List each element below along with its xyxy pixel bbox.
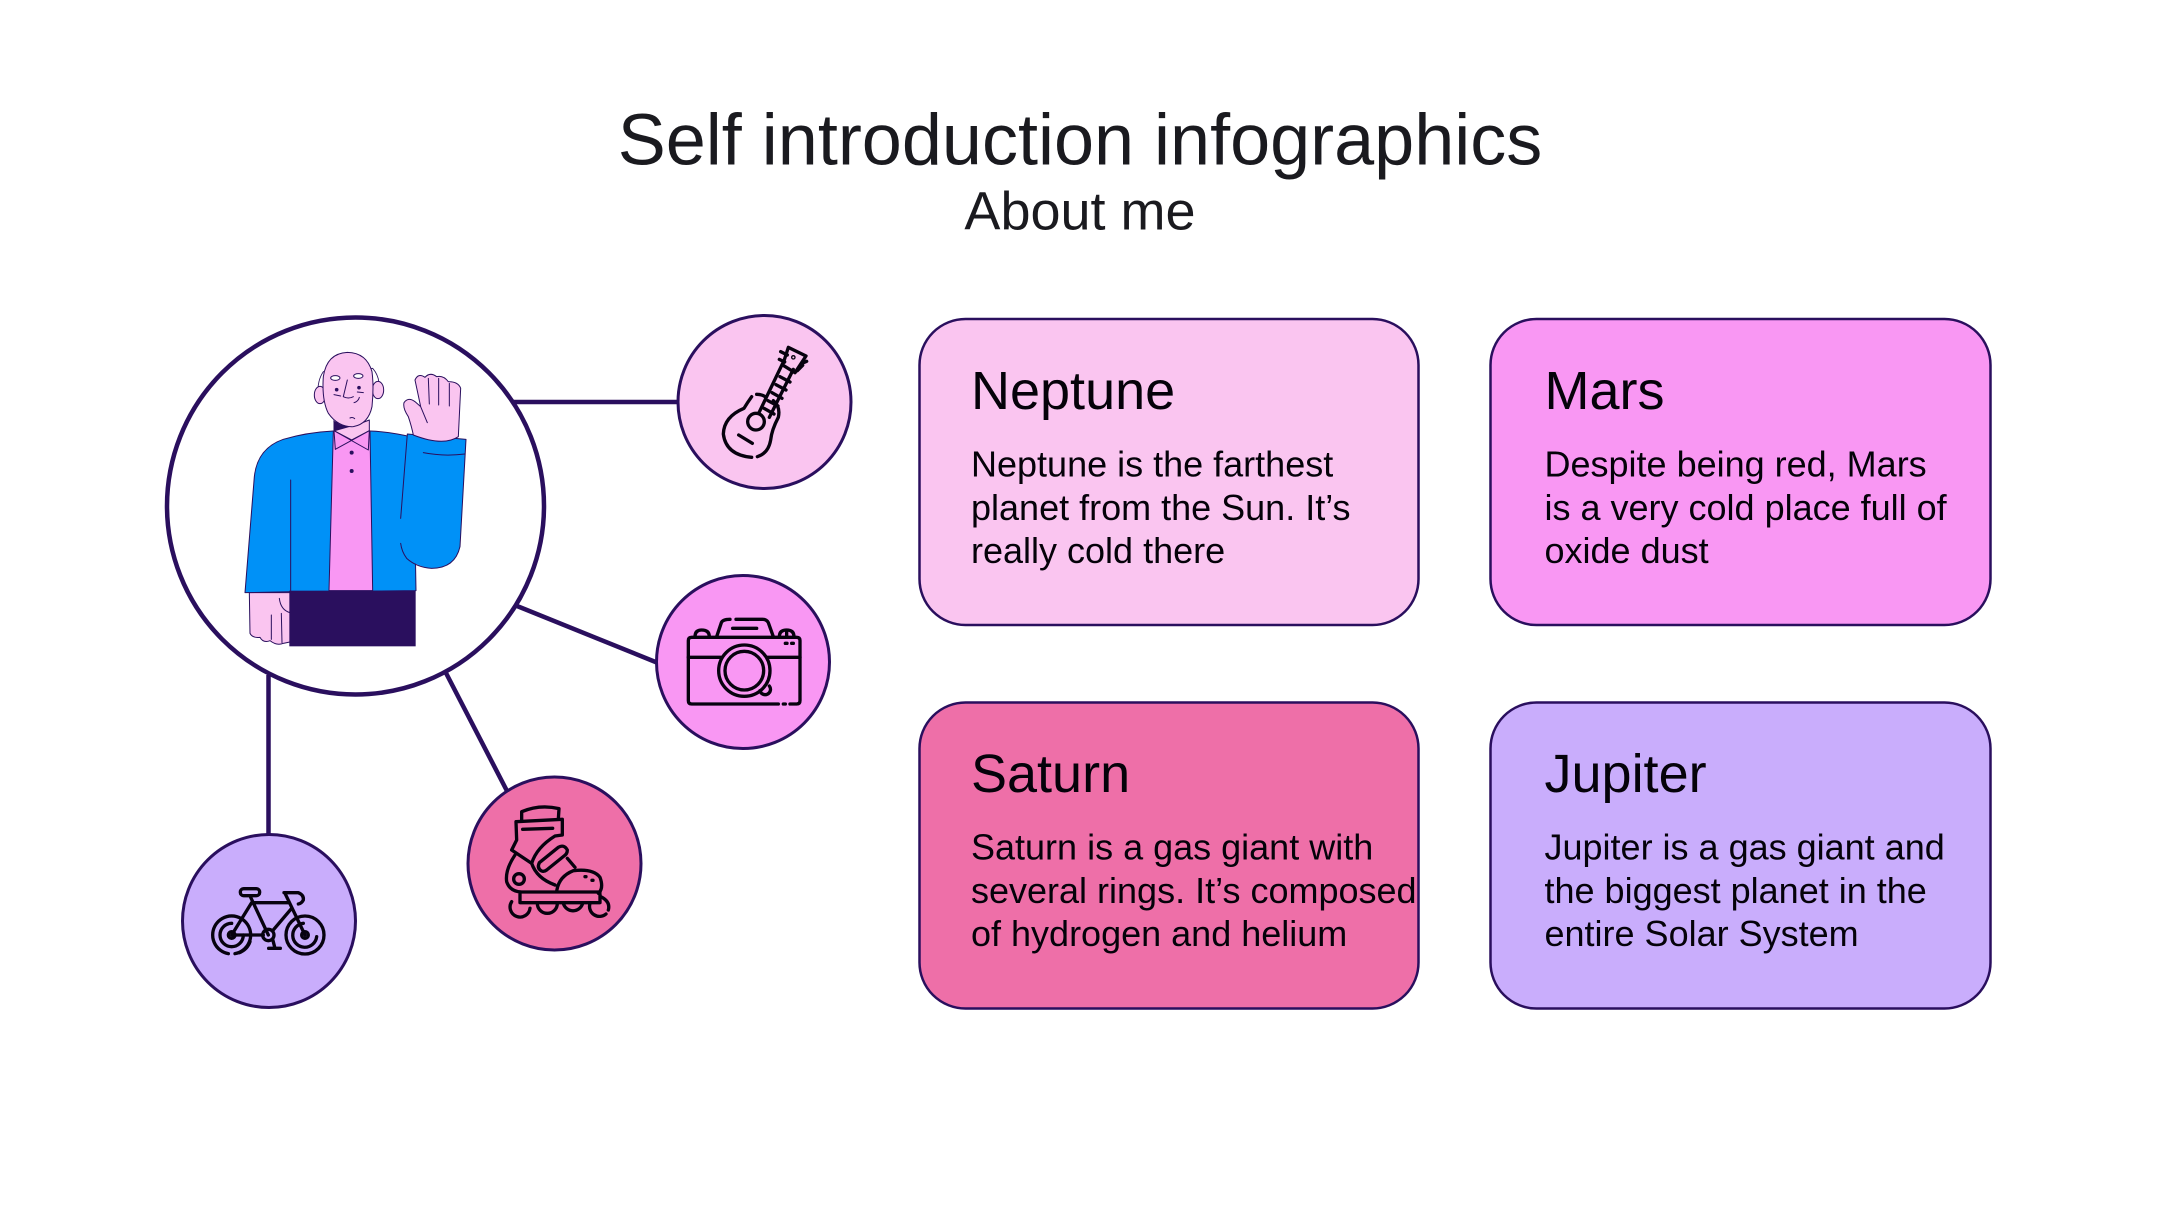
card: Jupiter bbox=[1490, 702, 1990, 1008]
card text: oxide dust bbox=[1544, 530, 1709, 571]
bicycle circle bbox=[182, 834, 356, 1008]
portrait circle bbox=[167, 318, 544, 694]
card background bbox=[1490, 319, 1990, 625]
card heading: Neptune bbox=[971, 361, 1175, 421]
node: guitar bbox=[678, 316, 851, 488]
illustration: waving man bbox=[245, 352, 466, 646]
card heading: Jupiter bbox=[1544, 744, 1707, 804]
card background bbox=[1490, 702, 1990, 1008]
cuff line bbox=[423, 453, 465, 455]
collar bbox=[334, 431, 369, 450]
card background bbox=[920, 319, 1418, 625]
face bbox=[331, 374, 363, 419]
card text: of hydrogen and helium bbox=[971, 913, 1347, 954]
card background bbox=[920, 702, 1418, 1008]
card text: really cold there bbox=[971, 530, 1225, 571]
node: rollerblade bbox=[468, 777, 641, 950]
card text: Neptune is the farthest bbox=[971, 444, 1333, 484]
hair bbox=[318, 368, 379, 395]
subtitle: About me bbox=[964, 182, 1196, 242]
jacket bbox=[245, 431, 416, 593]
card: Saturn bbox=[920, 702, 1418, 1008]
card text: Saturn is a gas giant with bbox=[971, 826, 1373, 868]
guitar circle bbox=[678, 316, 851, 488]
card heading: Mars bbox=[1544, 361, 1664, 421]
shirt buttons bbox=[350, 451, 354, 473]
icon: camera bbox=[688, 619, 800, 704]
connector: person to guitar bbox=[513, 400, 678, 404]
node: bicycle bbox=[182, 834, 356, 1008]
connector: person to camera bbox=[517, 606, 658, 663]
jacket seam bbox=[289, 480, 292, 592]
connector: person to rollerblade bbox=[446, 673, 507, 791]
head bbox=[323, 352, 373, 427]
card: Neptune bbox=[920, 319, 1418, 625]
icon: guitar bbox=[723, 347, 807, 457]
shirt bbox=[329, 431, 373, 591]
raised forearm outline bbox=[401, 434, 466, 568]
neck shadow bbox=[333, 420, 351, 431]
rollerblade circle bbox=[468, 777, 641, 950]
icon: bicycle bbox=[213, 889, 324, 954]
icon: rollerblade bbox=[506, 807, 609, 917]
raised forearm fill bbox=[401, 434, 466, 568]
left ear bbox=[314, 386, 326, 404]
right ear bbox=[372, 381, 384, 399]
raised hand bbox=[404, 374, 461, 441]
card text: planet from the Sun. It’s bbox=[971, 487, 1351, 528]
card: Mars bbox=[1490, 319, 1990, 625]
node: camera bbox=[656, 576, 830, 748]
card text: is a very cold place full of bbox=[1544, 487, 1948, 528]
neck bbox=[334, 420, 369, 440]
card text: Jupiter is a gas giant and bbox=[1544, 826, 1945, 868]
lower hand bbox=[249, 593, 292, 644]
card text: Despite being red, Mars bbox=[1544, 444, 1927, 484]
connector: person to bicycle bbox=[266, 675, 271, 835]
camera circle bbox=[656, 576, 830, 748]
card text: entire Solar System bbox=[1544, 913, 1859, 954]
title: Self introduction infographics bbox=[618, 100, 1542, 180]
card heading: Saturn bbox=[971, 744, 1130, 804]
trousers bbox=[289, 591, 416, 646]
card text: several rings. It’s composed bbox=[971, 870, 1417, 911]
card text: the biggest planet in the bbox=[1544, 870, 1927, 911]
